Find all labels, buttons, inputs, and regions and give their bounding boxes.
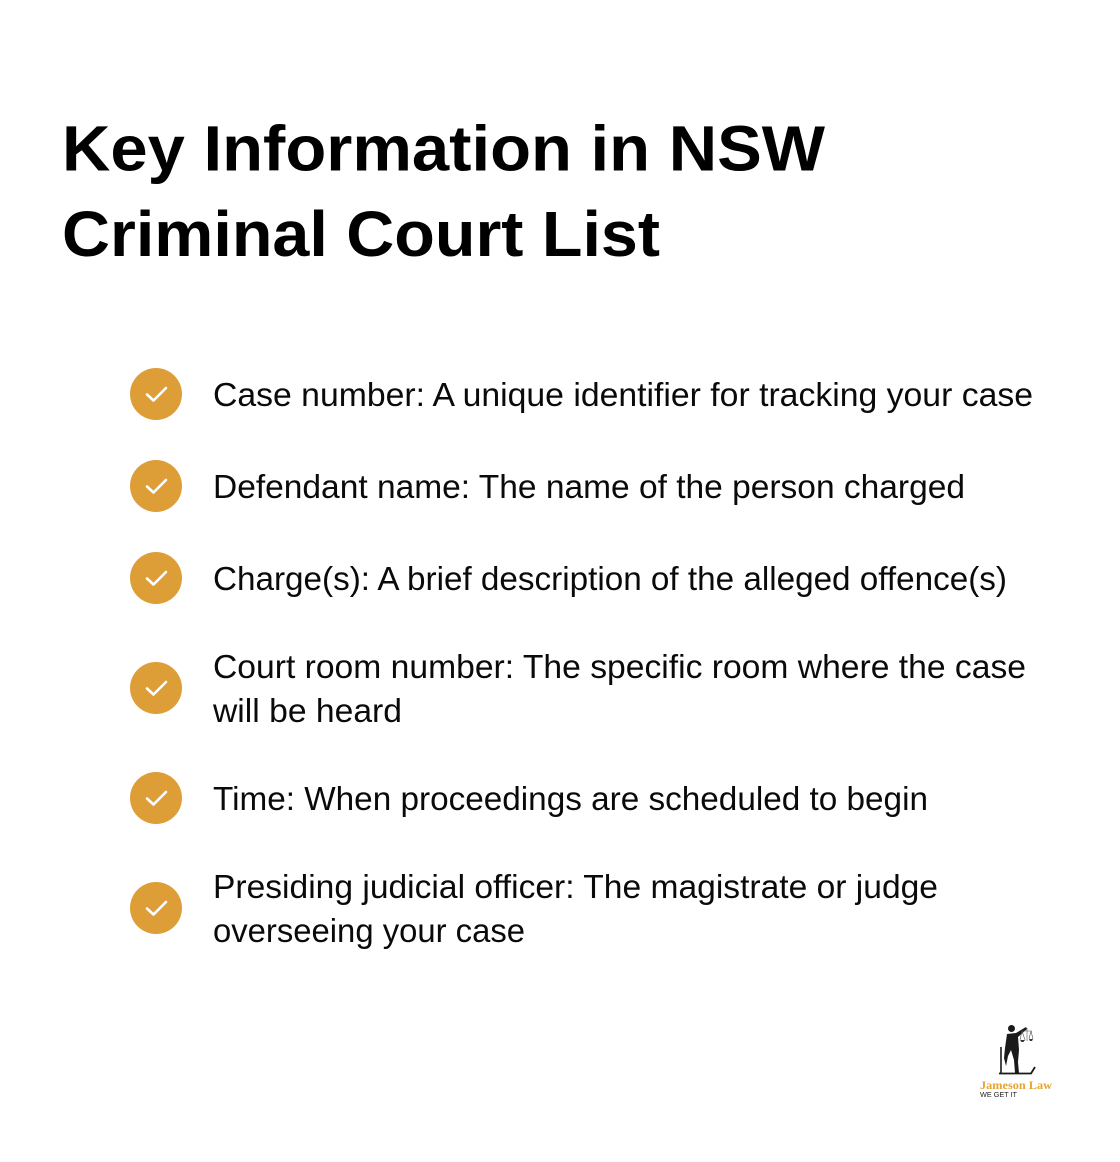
title (62, 112, 826, 270)
icon: lady justice (999, 1025, 1035, 1074)
item: court room number: will be heard (212, 692, 402, 729)
logo tagline: WE GET IT (980, 1092, 1018, 1099)
item: time (130, 772, 928, 824)
item: case number: Case number: A unique identifier for tracking your case (213, 376, 1033, 413)
item: charges: Charge(s): A brief description of the alleged offence(s) (213, 560, 1007, 597)
item: presiding judicial officer: Presiding judicial officer: The magistrate or judge (213, 868, 938, 905)
item: court room number: Court room number: The specific room where the case (213, 648, 1026, 685)
item: charges (130, 552, 1007, 604)
item: time: Time: When proceedings are scheduled to begin (213, 780, 928, 817)
logo wordmark: Jameson Law (980, 1080, 1053, 1092)
item: presiding judicial officer (130, 868, 938, 949)
item: defendant name: Defendant name: The name of the person charged (213, 468, 965, 505)
title: Criminal Court List (62, 198, 660, 270)
item: defendant name (130, 460, 965, 512)
logo: Jameson Law (980, 1025, 1053, 1099)
item: presiding judicial officer: overseeing your case (213, 912, 525, 949)
item: case number (130, 368, 1033, 420)
checklist (130, 368, 1033, 949)
title: Key Information in NSW (62, 112, 826, 184)
item: court room number (130, 648, 1026, 729)
